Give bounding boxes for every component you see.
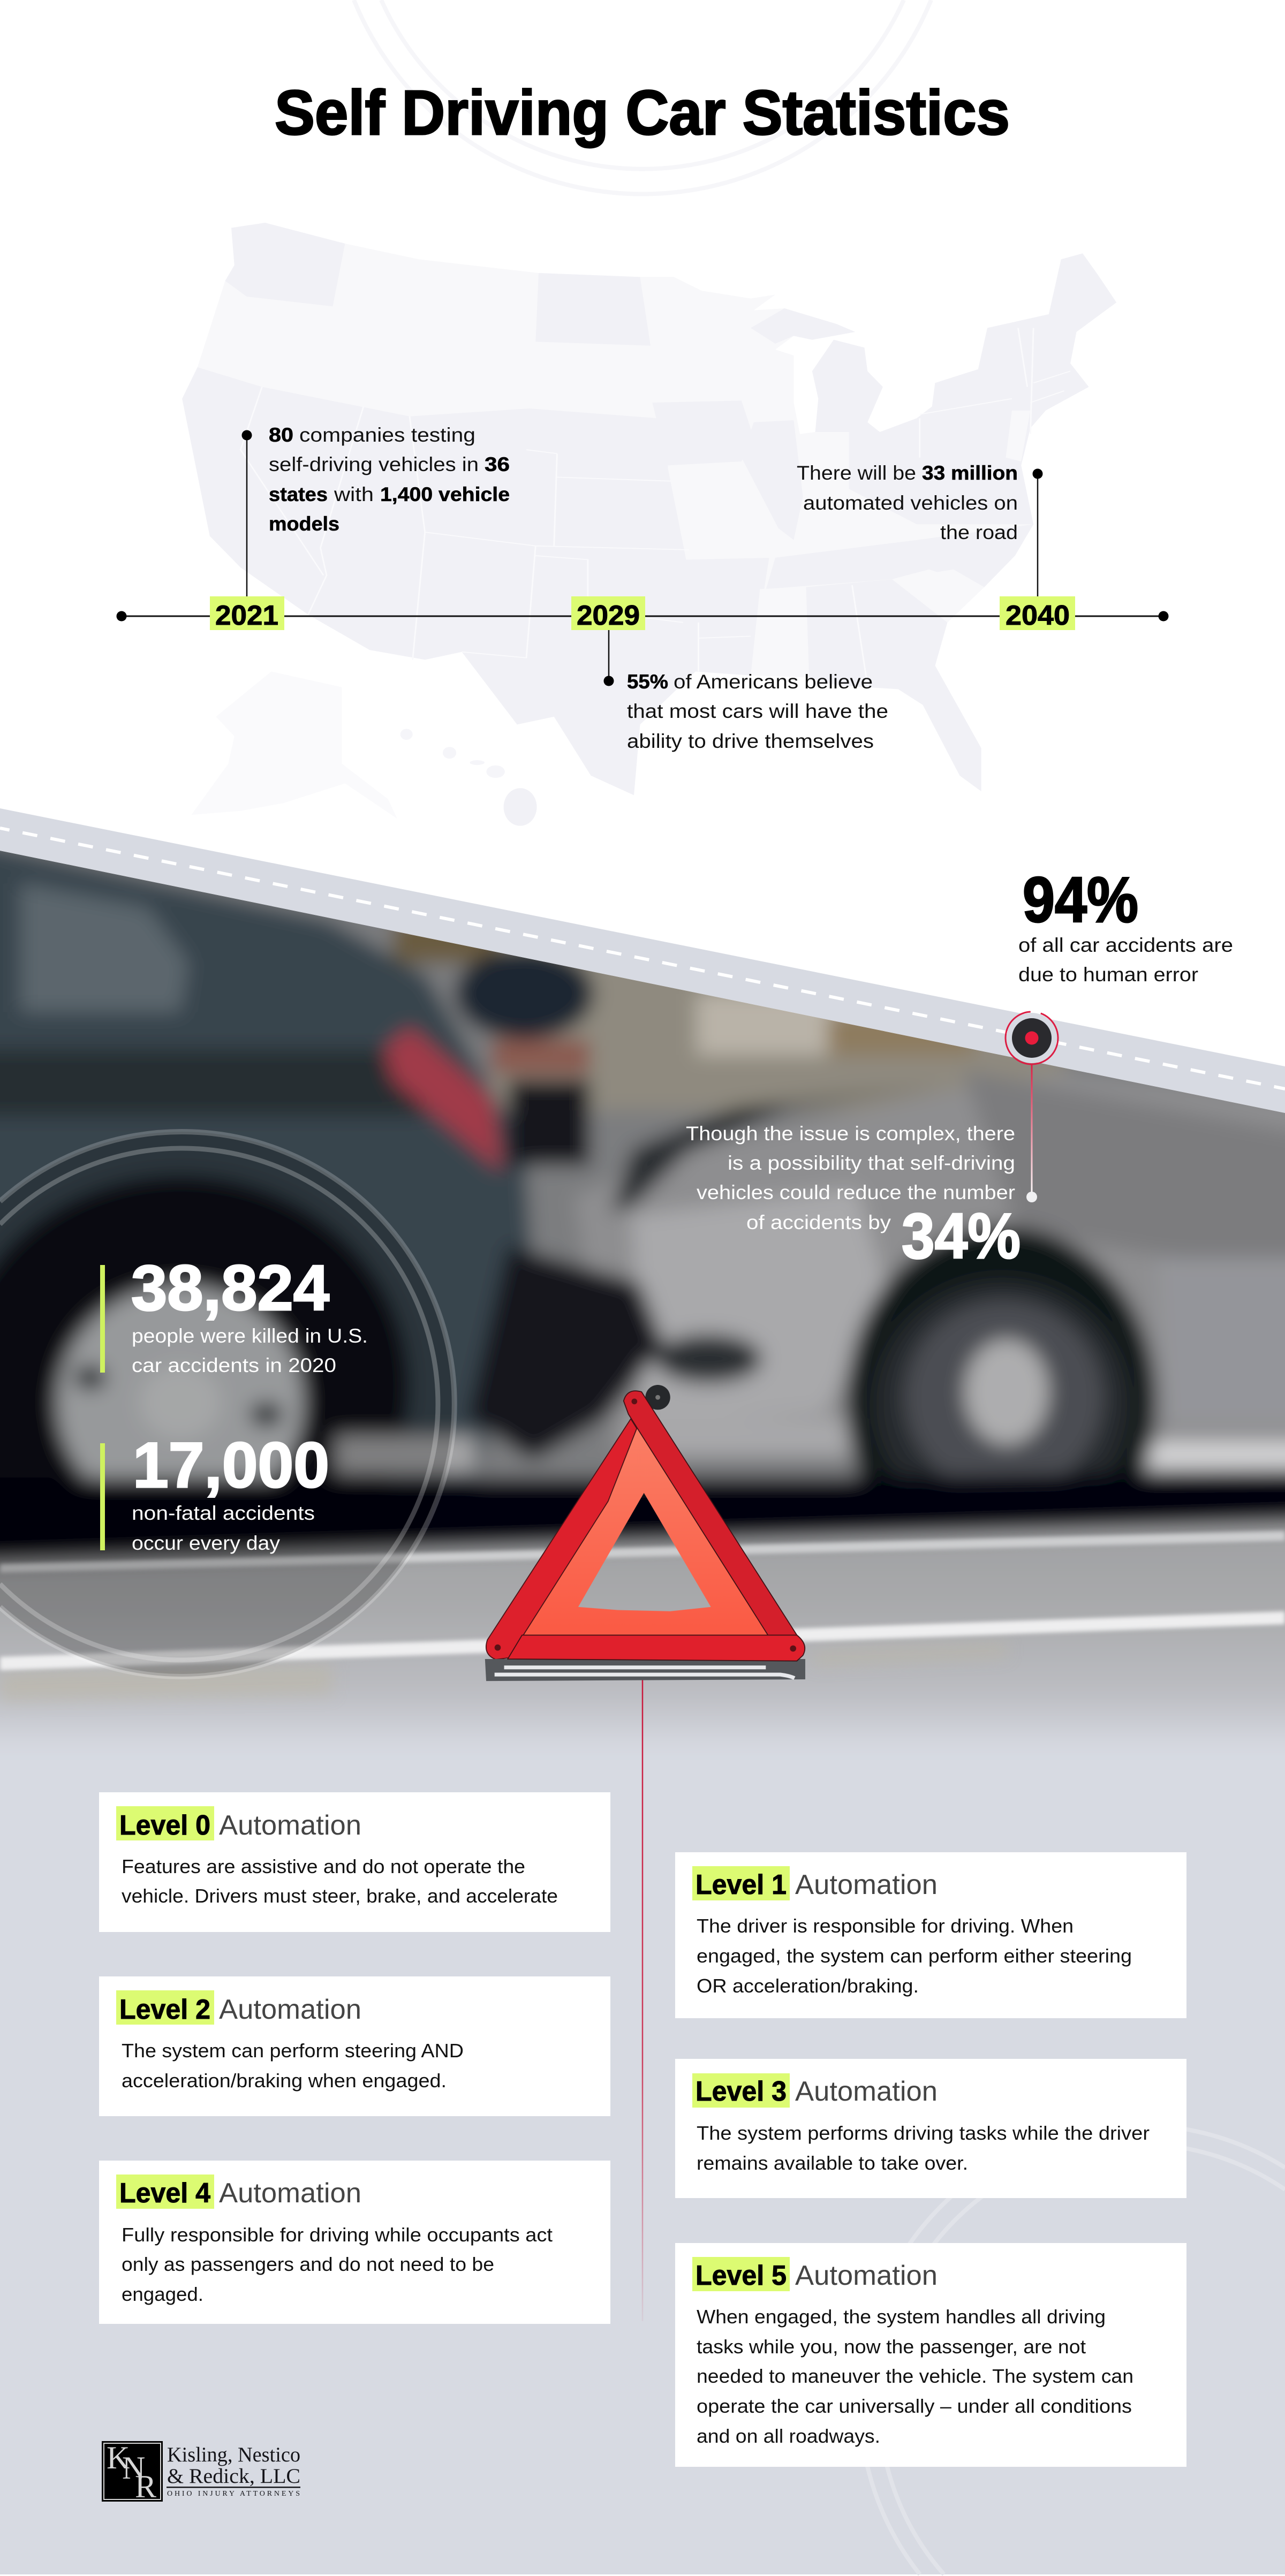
milestone 2040: There will be: [797, 462, 916, 484]
stat: 17,000 non-fatal: 17,000: [133, 1429, 329, 1501]
milestone 2021: companies testing: [299, 424, 475, 446]
icon: KNR monogram: [102, 2440, 163, 2504]
panel: level 4: only as passengers and do not need to be: [122, 2253, 494, 2275]
milestone 2021: self-driving vehicles in: [269, 453, 479, 475]
translucent circle panel: [0, 1132, 455, 1677]
milestone 2021: [210, 424, 510, 631]
stat: 94% human error: due to human error: [1018, 964, 1198, 986]
milestone 2021: 2021: [215, 600, 278, 631]
milestone 2040: [797, 462, 1075, 631]
logo: Kisling, Nestico & Redick: & Redick, LLC: [167, 2465, 300, 2488]
milestone 2029: 2029: [577, 600, 640, 631]
under-car shadow: [0, 1469, 1285, 1569]
panel: level 3: Automation: [795, 2076, 938, 2107]
panel: level 0: Level 0: [119, 1810, 210, 1841]
milestone 2021: 36: [485, 453, 510, 475]
panel: level 5: needed to maneuver the vehicle. The system can: [697, 2365, 1133, 2387]
logo: Kisling, Nestico & Redick: OHIO INJURY ATTORNEYS: [167, 2490, 300, 2498]
panel: level 4: [99, 2161, 610, 2324]
milestone 2029: that most cars will have the: [627, 700, 888, 722]
decorative circles at bottom right: [860, 2125, 1285, 2574]
stat: 38,824 killed: 38,824: [131, 1252, 329, 1324]
icon: KNR monogram: K: [107, 2440, 130, 2475]
icon: KNR monogram: R: [135, 2469, 156, 2504]
stat: 34% reduction: vehicles could reduce the number: [697, 1181, 1015, 1203]
panel: level 4: Fully responsible for driving while occupants act: [122, 2224, 553, 2246]
panel: level 0: [99, 1792, 610, 1932]
milestone 2029: 55%: [627, 671, 668, 693]
stat: 38,824 killed: car accidents in 2020: [132, 1354, 336, 1376]
panel: level 4: Level 4: [119, 2178, 210, 2209]
logo: Kisling, Nestico & Redick: [102, 2440, 300, 2504]
panel: level 2: [99, 1976, 610, 2116]
panel: level 2: acceleration/braking when engaged.: [122, 2070, 447, 2092]
milestone 2040: 33 million: [922, 462, 1018, 484]
logo: Kisling, Nestico & Redick: Kisling, Nestico: [167, 2443, 300, 2466]
milestone 2029: [571, 596, 888, 752]
asphalt: [0, 1502, 1285, 1745]
panel: level 1: Level 1: [696, 1869, 787, 1900]
red connector line: [642, 1660, 643, 2321]
stat: 94% human error: 94%: [1023, 864, 1138, 936]
panel: level 1: Automation: [795, 1869, 938, 1900]
milestone 2029: ability to drive themselves: [627, 730, 874, 752]
milestone 2021: models: [269, 513, 339, 535]
panel: level 5: Level 5: [696, 2260, 787, 2291]
panel: level 3: remains available to take over.: [697, 2152, 968, 2174]
decorative circles at top: [354, 0, 931, 194]
panel: level 2: Level 2: [119, 1994, 210, 2025]
stat: 17,000 non-fatal: [100, 1429, 329, 1554]
panel: level 0: Features are assistive and do not operate the: [122, 1855, 525, 1877]
road band: [0, 808, 1285, 1113]
stat: 38,824 killed: people were killed in U.S.: [132, 1325, 368, 1347]
panel: level 2: Automation: [219, 1994, 361, 2025]
panel: level 0: vehicle. Drivers must steer, brake, and accelerate: [122, 1885, 558, 1907]
stat: 34% reduction: Though the issue is complex, there: [686, 1123, 1015, 1145]
panel: level 4: engaged.: [122, 2283, 203, 2305]
panel: level 1: The driver is responsible for driving. When: [697, 1915, 1074, 1937]
panel: level 2: The system can perform steering AND: [122, 2040, 464, 2062]
panel: level 3: Level 3: [696, 2076, 787, 2107]
stat: 94% human error: of all car accidents are: [1018, 934, 1233, 956]
stat: 34% reduction: 34%: [902, 1200, 1021, 1272]
photo: crash scene background: [0, 851, 1285, 1745]
stat: 94% human error: [1018, 864, 1233, 986]
stat: 34% reduction: of accidents by: [746, 1211, 891, 1233]
title: Self Driving Car Statistics: [275, 78, 1010, 148]
milestone 2040: automated vehicles on: [803, 492, 1018, 514]
milestone 2021: 80: [269, 424, 293, 446]
milestone 2029: of Americans believe: [674, 671, 873, 693]
panel: level 4: Automation: [219, 2178, 361, 2209]
panel: level 3: [675, 2059, 1186, 2198]
stat: 17,000 non-fatal: non-fatal accidents: [132, 1502, 315, 1524]
silver car: [606, 1074, 1285, 1498]
timeline: [117, 424, 1168, 752]
panel: level 5: tasks while you, now the passenger, are not: [697, 2336, 1086, 2358]
milestone 2040: 2040: [1006, 600, 1070, 631]
panel: level 1: OR acceleration/braking.: [697, 1975, 919, 1997]
panel: level 5: [675, 2243, 1186, 2467]
stat: 34% reduction: [686, 1123, 1021, 1272]
panel: level 1: engaged, the system can perform either steering: [697, 1945, 1132, 1967]
icon: KNR monogram: N: [122, 2450, 145, 2486]
panel: level 1: [675, 1852, 1186, 2018]
stat: 38,824 killed: [100, 1252, 368, 1376]
panel: level 3: The system performs driving tasks while the driver: [697, 2122, 1150, 2144]
stat: 17,000 non-fatal: occur every day: [132, 1532, 281, 1554]
milestone 2040: the road: [940, 521, 1018, 543]
stat: 34% reduction: is a possibility that self-driving: [728, 1152, 1015, 1174]
milestone 2021: with: [334, 483, 374, 505]
icon: warning triangle: [485, 1385, 805, 1681]
panel: level 5: operate the car universally – under all conditions: [697, 2395, 1132, 2417]
panel: level 0: Automation: [219, 1810, 361, 1841]
milestone 2021: states: [269, 483, 328, 505]
road markings: [0, 1531, 1285, 1701]
road marker pin: [998, 1004, 1065, 1202]
map: United States background: [182, 223, 1116, 826]
lower section background: [0, 1745, 1285, 2574]
panel: level 5: and on all roadways.: [697, 2425, 880, 2447]
panel: level 5: When engaged, the system handles all driving: [697, 2306, 1106, 2328]
panel: level 5: Automation: [795, 2260, 938, 2291]
milestone 2021: 1,400 vehicle: [380, 483, 510, 505]
